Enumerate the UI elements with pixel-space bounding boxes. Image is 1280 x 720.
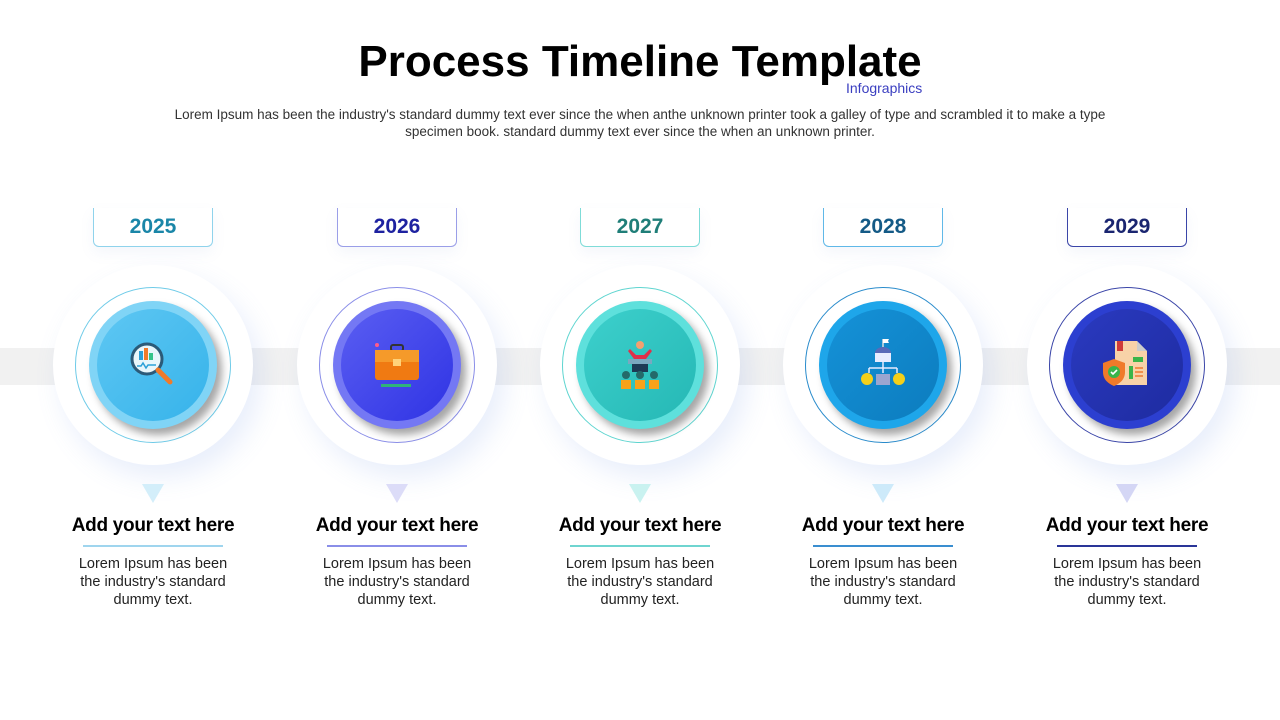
body 2025: Lorem Ipsum has been the industry's standard dummy text. <box>79 556 227 608</box>
year label 2028 <box>823 208 943 247</box>
icon: document shield <box>1063 301 1191 429</box>
body 2026: Lorem Ipsum has been the industry's standard dummy text. <box>323 556 471 608</box>
step 2025 <box>53 208 265 608</box>
pointer <box>386 484 408 503</box>
step 2026 <box>297 208 509 608</box>
heading 2026: Add your text here <box>316 515 478 536</box>
year label 2028: 2028 <box>860 215 906 238</box>
pointer <box>872 484 894 503</box>
year label 2027: 2027 <box>617 215 663 238</box>
year label 2029 <box>1067 208 1187 247</box>
pointer <box>142 484 164 503</box>
body 2028: Lorem Ipsum has been the industry's standard dummy text. <box>809 556 957 608</box>
title: Process Timeline Template <box>358 37 922 86</box>
heading 2029: Add your text here <box>1046 515 1208 536</box>
pointer <box>1116 484 1138 503</box>
heading 2025: Add your text here <box>72 515 234 536</box>
body 2027: Lorem Ipsum has been the industry's standard dummy text. <box>566 556 714 608</box>
year label 2025: 2025 <box>130 215 176 238</box>
year label 2026: 2026 <box>374 215 420 238</box>
year label 2025 <box>93 208 213 247</box>
heading 2027: Add your text here <box>559 515 721 536</box>
intro text: Lorem Ipsum has been the industry's standard dummy text ever since the when anthe unknown printer took a galley of type and scrambled it to make a type specimen book. standard dummy text ever since the when an unknown printer. <box>175 107 1105 139</box>
timeline band <box>0 348 1280 385</box>
icon: organization <box>819 301 947 429</box>
body 2029: Lorem Ipsum has been the industry's standard dummy text. <box>1053 556 1201 608</box>
step 2029 <box>1027 208 1239 608</box>
pointer <box>629 484 651 503</box>
step 2028 <box>783 208 995 608</box>
subtitle: Infographics <box>846 80 922 96</box>
heading 2028: Add your text here <box>802 515 964 536</box>
year label 2027 <box>580 208 700 247</box>
year label 2029: 2029 <box>1104 215 1150 238</box>
icon: briefcase <box>333 301 461 429</box>
icon: presenter <box>576 301 704 429</box>
icon: magnifier chart <box>89 301 217 429</box>
year label 2026 <box>337 208 457 247</box>
step 2027 <box>540 208 752 608</box>
